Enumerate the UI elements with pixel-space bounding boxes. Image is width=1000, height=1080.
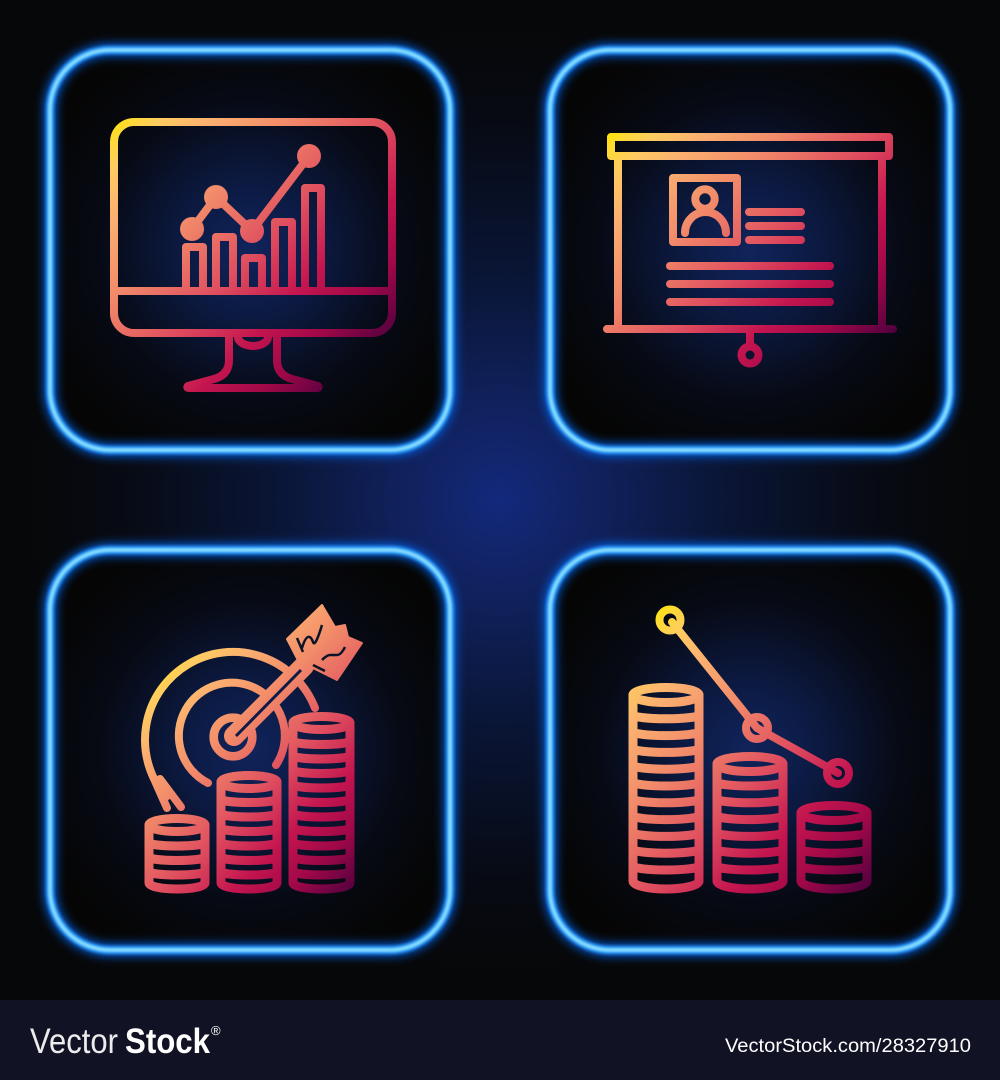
VectorStock logo: Stock	[125, 1022, 210, 1061]
icon: falling line over coin stacks	[633, 610, 867, 889]
small coin stack	[801, 806, 867, 889]
panel: monitor with chart	[50, 50, 450, 450]
image id: VectorStock.com/28327910	[725, 1036, 971, 1057]
panel: declining coins	[550, 550, 950, 950]
panel: projector screen	[550, 50, 950, 450]
icon: presentation board with profile	[607, 137, 893, 364]
icon: target with arrow above rising coin stacks	[145, 605, 362, 889]
VectorStock logo: Vector	[30, 1022, 118, 1061]
monitor frame	[114, 122, 392, 333]
VectorStock logo: ®	[211, 1023, 221, 1038]
screen stand knob	[742, 346, 758, 364]
screen roller and frame	[607, 137, 893, 346]
VectorStock logo	[30, 1022, 221, 1061]
medium coin stack	[221, 776, 277, 889]
icon: monitor with bar and line chart	[114, 122, 392, 388]
profile photo	[673, 178, 737, 242]
footer bar	[0, 1000, 1000, 1080]
small coin stack	[149, 818, 205, 889]
target rings	[145, 652, 315, 808]
bars	[186, 188, 321, 291]
monitor stand	[187, 337, 319, 388]
arrow	[234, 605, 362, 736]
medium coin stack	[717, 756, 783, 889]
tall coin stack	[633, 688, 699, 889]
tall coin stack	[293, 716, 350, 889]
panel: target and coins	[50, 550, 450, 950]
text lines	[670, 212, 830, 302]
trend line with dots	[180, 144, 321, 243]
falling trend line	[660, 610, 849, 784]
bullseye	[214, 718, 252, 756]
